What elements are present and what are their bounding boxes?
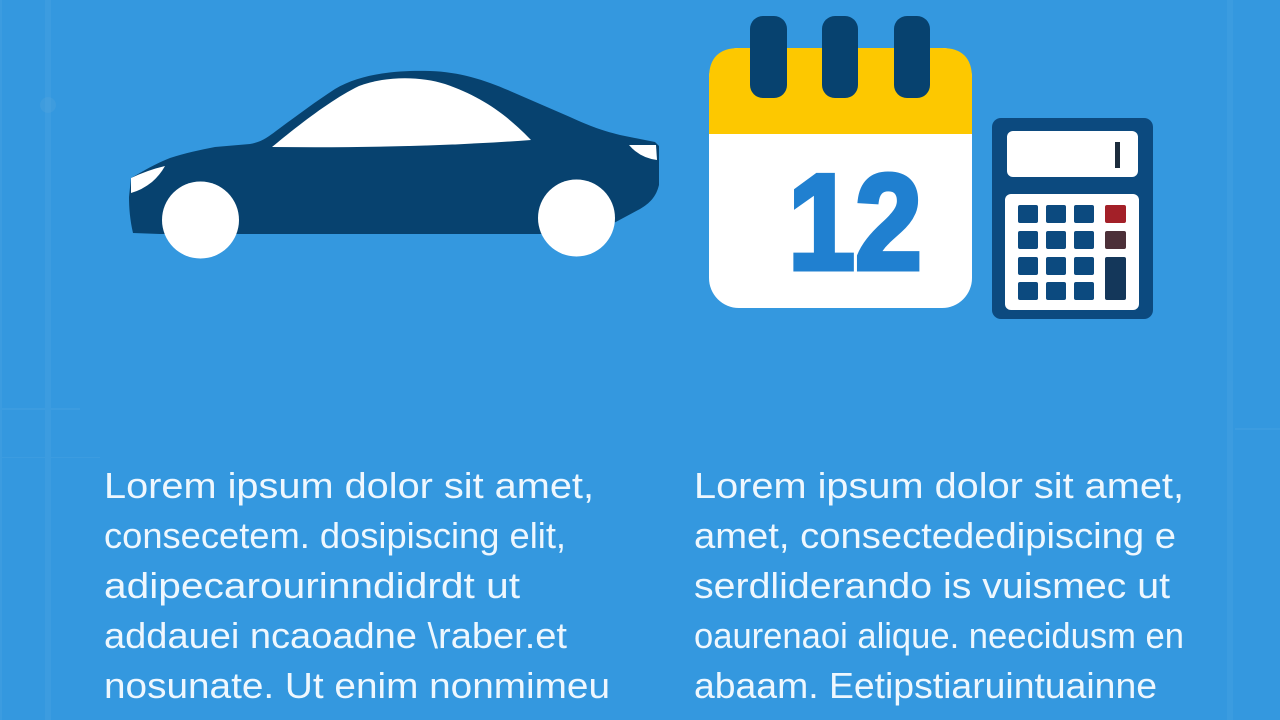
calculator cursor [1115,142,1120,168]
text block: right column: oaurenaoi alique. neecidusm en [694,615,1184,656]
text block: left column: addauei ncaoadne \raber.et [104,615,567,656]
text block: left column: adipecarourinndidrdt ut [104,565,520,606]
car headlight [131,166,165,193]
car tail light [629,145,657,160]
icon: calendar [709,16,972,308]
text block: left column [104,465,610,706]
calendar header [709,48,972,134]
text block: left column: nosunate. Ut enim nonmimeu [104,665,610,706]
calendar date number: 12 [788,146,922,298]
car front wheel [162,182,239,258]
icon: car [129,71,659,258]
calculator keypad [1005,194,1139,310]
text block: left column: Lorem ipsum dolor sit amet, [104,465,594,506]
car window [272,78,531,147]
text block: right column: serdliderando is vuismec ut [694,565,1170,606]
car body [129,71,659,234]
text block: right column: amet, consectededipiscing e [694,515,1176,556]
car rear wheel [538,180,615,256]
text block: right column: abaam. Eetipstiaruintuainne [694,665,1157,706]
calculator body [992,118,1153,319]
calendar rings [750,16,930,98]
calendar page [709,48,972,308]
calculator display [1007,131,1138,177]
text block: right column: Lorem ipsum dolor sit amet, [694,465,1184,506]
icon: calculator [992,118,1153,319]
calculator keys [1018,205,1126,300]
text block: left column: consecetem. dosipiscing elit, [104,515,566,556]
text block: right column [694,465,1184,706]
